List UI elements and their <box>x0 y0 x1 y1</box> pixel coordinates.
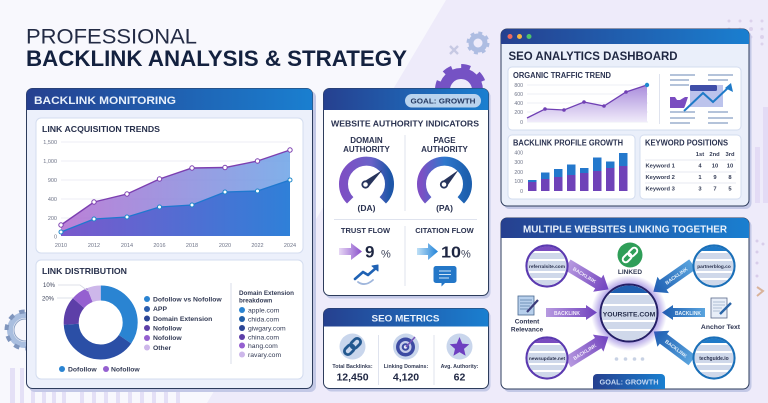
donut legend: Other <box>153 345 171 352</box>
dashboard heading: SEO ANALYTICS DASHBOARD <box>508 51 678 63</box>
area line chart: 2016 <box>153 243 166 249</box>
decorative dots: top right <box>728 20 764 46</box>
pagination dots <box>615 357 644 361</box>
domain extension breakdown: hang.com <box>248 343 278 350</box>
panel header <box>501 218 749 238</box>
stacked bar chart <box>514 150 628 195</box>
decorative gear: purple behind panel <box>438 66 484 114</box>
card: keyword positions <box>640 135 741 199</box>
metric: total backlinks: 12,450 <box>336 372 369 384</box>
panel: website authority indicators <box>324 88 490 298</box>
keyword table: 7 <box>713 186 717 192</box>
metric: citation flow: 10 <box>441 244 461 262</box>
icon: anchor text: Anchor Text <box>701 324 741 331</box>
domain extension breakdown: breakdown <box>239 298 272 304</box>
metric: average authority: Avg. Authority: <box>441 364 479 370</box>
title: BACKLINK ANALYSIS & STRATEGY <box>26 46 407 71</box>
metric: linking domains <box>384 334 428 384</box>
gauge: page authority: PAGE <box>433 136 456 145</box>
node: techguide.io <box>694 338 734 378</box>
goal pill: GOAL: GROWTH <box>410 96 476 106</box>
metric: trust flow: 9 <box>365 242 374 262</box>
area line chart: 900 <box>48 178 57 184</box>
donut callouts: 10% <box>43 283 56 289</box>
goal tab <box>593 374 665 389</box>
keyword table: 9 <box>713 175 717 181</box>
keyword table: 10 <box>712 164 718 170</box>
node: referralsite.com <box>526 246 568 286</box>
gauge: domain authority: AUTHORITY <box>343 145 390 154</box>
metric: average authority <box>441 334 479 384</box>
area line chart: 2018 <box>186 243 198 249</box>
keyword table: Keyword 2 <box>646 175 675 181</box>
node: partnerblog.co: partnerblog.co <box>697 264 731 270</box>
domain extension breakdown: chida.com <box>248 316 279 324</box>
metric: linking domains: 4,120 <box>393 372 419 384</box>
distribution heading: LINK DISTRIBUTION <box>42 266 127 276</box>
panel heading: BACKLINK MONITORING <box>34 95 176 107</box>
keyword table: 10 <box>727 164 733 170</box>
donut legend: Nofollow <box>153 326 182 332</box>
donut legend: Nofollow <box>153 335 182 342</box>
arrow: partner backlink: BACKLINK <box>664 266 690 286</box>
metric: citation flow: CITATION FLOW <box>415 226 475 235</box>
decorative cross <box>450 46 458 54</box>
card: organic traffic trend <box>508 67 741 130</box>
donut legend: Domain Extension <box>153 316 212 323</box>
arrow: content backlink <box>546 305 597 320</box>
metric: average authority: 62 <box>454 372 465 384</box>
domain extension breakdown: giwgary.com <box>248 326 286 332</box>
gauge: domain authority <box>343 136 390 213</box>
panel: seo metrics <box>324 308 490 392</box>
card: link distribution <box>36 260 303 379</box>
line chart: 0 <box>520 120 523 126</box>
title <box>26 26 407 71</box>
domain extension breakdown: Domain Extension <box>239 290 294 297</box>
node: techguide.io: techguide.io <box>699 356 729 362</box>
donut bottom legend <box>59 366 140 374</box>
icon: chain link <box>343 337 362 356</box>
arrow: anchor backlink: BACKLINK <box>675 311 701 317</box>
panel header <box>324 308 488 326</box>
browser bar <box>501 29 749 44</box>
metric: trust flow: TRUST FLOW <box>341 226 391 235</box>
node: yoursite.com <box>591 275 667 351</box>
line chart <box>514 83 649 126</box>
card: link acquisition trends <box>36 118 303 253</box>
decorative gear: left <box>6 312 44 348</box>
metric: trust flow: % <box>381 248 391 260</box>
gauge: page authority: AUTHORITY <box>421 145 468 154</box>
icon: target <box>396 337 415 356</box>
donut callouts: 20% <box>42 296 55 302</box>
metric: citation flow <box>415 226 475 286</box>
donut legend: APP <box>153 306 167 313</box>
area line chart: 1,500 <box>43 140 57 146</box>
domain extension breakdown <box>239 290 294 359</box>
arrow: referral backlink <box>562 256 614 298</box>
card: backlink profile growth <box>508 135 635 199</box>
stacked bar chart: 200 <box>514 170 523 176</box>
panel: backlink monitoring <box>26 88 316 392</box>
stacked bar chart: 300 <box>514 160 523 166</box>
title: PROFESSIONAL <box>26 26 197 48</box>
icon: linked <box>618 242 642 276</box>
stacked bar chart: 100 <box>514 179 523 185</box>
domain extension breakdown: ravary.com <box>248 352 281 359</box>
card heading: ORGANIC TRAFFIC TREND <box>513 71 611 80</box>
metric: total backlinks <box>332 334 373 384</box>
icon: chat <box>434 266 456 286</box>
gauge: page authority <box>421 136 468 213</box>
area line chart: 2024 <box>284 243 296 249</box>
area line chart: 200 <box>48 216 57 222</box>
arrow: partner backlink <box>648 256 698 300</box>
node: newsupdate.net <box>526 338 568 378</box>
keyword table: 3rd <box>725 152 735 158</box>
line chart: 800 <box>514 83 523 89</box>
icon: content relevance: Relevance <box>511 326 543 334</box>
arrow: referral backlink: BACKLINK <box>571 267 597 285</box>
keyword table: Keyword 3 <box>646 186 676 192</box>
donut legend: Dofollow vs Nofollow <box>153 296 222 304</box>
arrow: news backlink: BACKLINK <box>572 343 598 362</box>
panel: seo analytics dashboard <box>501 29 752 209</box>
arrow: content backlink: BACKLINK <box>554 311 580 317</box>
keyword table: 5 <box>728 186 732 192</box>
stacked bar chart: 0 <box>520 189 523 195</box>
illustration: report with arrow <box>670 75 733 123</box>
domain extension breakdown: china.com <box>248 334 279 342</box>
panel header <box>324 88 488 110</box>
arrow: anchor backlink <box>662 305 705 320</box>
area line chart: 0 <box>54 234 57 240</box>
card heading: KEYWORD POSITIONS <box>645 138 728 148</box>
chart heading: LINK ACQUISITION TRENDS <box>42 124 160 134</box>
panel header <box>26 88 312 110</box>
node: newsupdate.net: newsupdate.net <box>529 356 566 362</box>
icon: anchor text <box>701 298 741 331</box>
icon: content relevance: Content <box>515 318 540 326</box>
area line chart: 2020 <box>219 243 231 249</box>
line chart: 400 <box>514 101 523 107</box>
area line chart: 2014 <box>121 243 133 249</box>
donut chart <box>71 293 130 352</box>
area line chart: 400 <box>48 197 57 203</box>
arrow: tech backlink: BACKLINK <box>663 339 688 360</box>
card heading: BACKLINK PROFILE GROWTH <box>513 138 623 148</box>
area line chart: 2010 <box>55 243 67 249</box>
decorative bars: right <box>755 107 768 203</box>
gauge: page authority: (PA) <box>436 203 453 213</box>
icon: content relevance <box>511 296 543 334</box>
keyword table <box>645 152 736 192</box>
area line chart: 2022 <box>251 243 264 249</box>
panel heading: SEO METRICS <box>372 314 440 324</box>
panel: multiple websites linking together <box>501 218 752 392</box>
donut bottom legend: Dofollow <box>68 366 97 374</box>
icon: growth trend <box>355 265 378 284</box>
area line chart: 2012 <box>88 243 100 249</box>
arrow: news backlink <box>562 328 614 371</box>
metric: trust flow <box>339 226 391 284</box>
keyword table: 3 <box>698 186 702 192</box>
decorative chevron and dots: right <box>756 240 764 296</box>
node: yoursite.com: YOURSITE.COM <box>603 312 656 318</box>
node: referralsite.com: referralsite.com <box>529 264 565 270</box>
stacked bar chart: 400 <box>514 150 523 156</box>
donut bottom legend: Nofollow <box>111 366 140 374</box>
metric: linking domains: Linking Domains: <box>384 364 428 370</box>
domain extension breakdown: apple.com <box>248 308 280 314</box>
indicators heading: WEBSITE AUTHORITY INDICATORS <box>331 118 479 128</box>
keyword table: 4 <box>698 164 702 170</box>
donut legend <box>144 296 222 352</box>
area line chart <box>43 140 296 249</box>
metric: total backlinks: Total Backlinks: <box>332 364 373 370</box>
area line chart: 1,000 <box>43 159 57 165</box>
keyword table: 1st <box>696 152 704 158</box>
gauge: domain authority: DOMAIN <box>350 136 383 145</box>
keyword table: 1 <box>698 175 702 181</box>
node: partnerblog.co <box>694 246 734 286</box>
decorative bars: bottom left <box>10 368 180 403</box>
line chart: 200 <box>514 110 523 116</box>
icon: linked: LINKED <box>618 269 642 276</box>
gauge: domain authority: (DA) <box>358 203 376 213</box>
keyword table: Keyword 1 <box>646 164 676 170</box>
panel heading: MULTIPLE WEBSITES LINKING TOGETHER <box>523 224 728 236</box>
keyword table: 8 <box>728 175 732 181</box>
icon: star <box>450 337 469 356</box>
keyword table: 2nd <box>709 152 720 158</box>
goal pill <box>405 94 481 108</box>
goal tab: GOAL: GROWTH <box>600 378 658 386</box>
donut callouts <box>42 283 88 302</box>
arrow: tech backlink <box>648 324 698 368</box>
line chart: 600 <box>514 92 523 98</box>
metric: citation flow: % <box>461 248 471 260</box>
decorative gear: light blue top <box>468 34 488 52</box>
